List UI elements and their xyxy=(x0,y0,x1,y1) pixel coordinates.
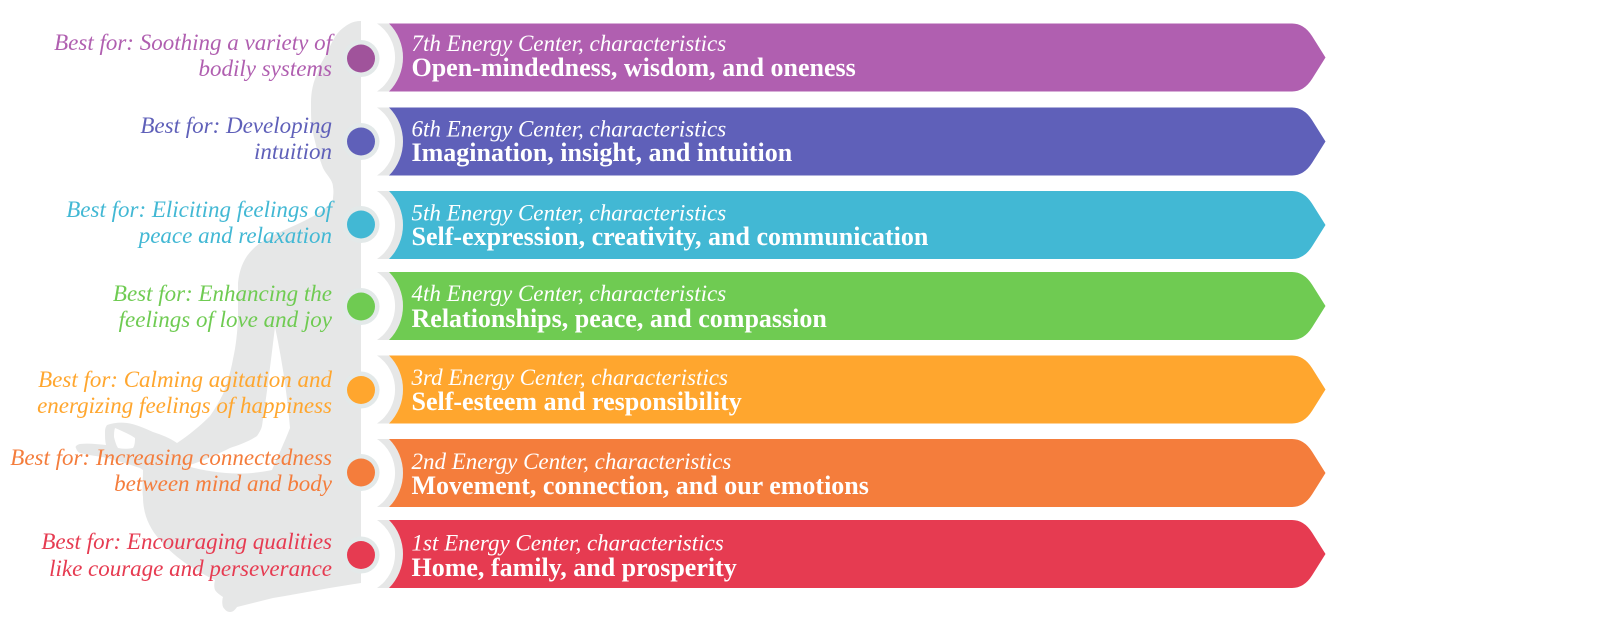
banner: 6th energy center: 6th Energy Center, characteristics xyxy=(412,116,726,142)
banner: 1st energy center: Home, family, and prosperity xyxy=(412,553,737,582)
banner: 5th energy center: 5th Energy Center, characteristics xyxy=(412,200,726,226)
best for: 3rd energy center: Best for: Calming agitation and xyxy=(38,367,332,392)
marker: 7th energy center xyxy=(342,40,380,77)
banner: 7th energy center: Open-mindedness, wisdom, and oneness xyxy=(412,53,856,82)
banner: 3rd energy center xyxy=(377,356,1326,424)
best for: 4th energy center: feelings of love and joy xyxy=(119,307,333,332)
best for: 1st energy center: Best for: Encouraging qualities xyxy=(41,529,332,554)
best for: 7th energy center: Best for: Soothing a variety of xyxy=(54,30,336,55)
marker: 3rd energy center xyxy=(342,372,380,408)
best for: 3rd energy center: energizing feelings of happiness xyxy=(37,393,332,418)
banner: 2nd energy center: Movement, connection, and our emotions xyxy=(412,471,869,500)
best for: 7th energy center: bodily systems xyxy=(198,56,332,81)
best for: 6th energy center: intuition xyxy=(254,139,332,164)
best for: 4th energy center: Best for: Enhancing the xyxy=(113,281,332,306)
banner: 4th energy center: Relationships, peace, and compassion xyxy=(412,304,827,333)
best for: 5th energy center: peace and relaxation xyxy=(137,223,332,248)
banner: 2nd energy center xyxy=(377,439,1326,507)
banner: 4th energy center: 4th Energy Center, characteristics xyxy=(412,281,726,306)
marker: 5th energy center xyxy=(342,206,380,243)
best for: 1st energy center: like courage and perseverance xyxy=(49,556,332,581)
banner: 2nd energy center: 2nd Energy Center, characteristics xyxy=(412,449,731,474)
best for: 2nd energy center: between mind and body xyxy=(114,471,333,496)
best for: 6th energy center: Best for: Developing xyxy=(140,113,332,138)
banner: 6th energy center: Imagination, insight, and intuition xyxy=(412,138,793,167)
row: 7th energy center xyxy=(54,24,1326,92)
row: 3rd energy center xyxy=(37,356,1326,424)
row: 6th energy center xyxy=(140,108,1326,176)
marker: 6th energy center xyxy=(342,123,380,160)
best for: 5th energy center: Best for: Eliciting feelings of xyxy=(66,197,336,222)
banner: 4th energy center xyxy=(377,272,1326,340)
best for: 7th energy center xyxy=(54,30,336,81)
banner: 3rd energy center: Self-esteem and responsibility xyxy=(412,387,742,416)
row: 1st energy center xyxy=(41,520,1326,588)
banner: 5th energy center: Self-expression, creativity, and communication xyxy=(412,222,929,251)
row: 4th energy center xyxy=(113,272,1326,340)
banner: 3rd energy center: 3rd Energy Center, characteristics xyxy=(410,365,728,390)
best for: 6th energy center xyxy=(140,113,332,164)
banner: 1st energy center xyxy=(377,520,1326,588)
best for: 2nd energy center: Best for: Increasing connectedness xyxy=(10,445,332,470)
row: 2nd energy center xyxy=(10,439,1326,507)
banner: 7th energy center: 7th Energy Center, characteristics xyxy=(412,31,726,56)
marker: 4th energy center xyxy=(342,288,380,325)
row: 5th energy center xyxy=(66,191,1326,259)
banner: 1st energy center: 1st Energy Center, characteristics xyxy=(412,530,724,556)
best for: 5th energy center xyxy=(66,197,336,248)
best for: 1st energy center xyxy=(41,529,332,581)
best for: 4th energy center xyxy=(113,281,333,332)
banner: 7th energy center xyxy=(377,24,1326,92)
best for: 3rd energy center xyxy=(37,367,332,418)
best for: 2nd energy center xyxy=(10,445,333,496)
marker: 2nd energy center xyxy=(342,454,380,491)
marker: 1st energy center xyxy=(342,536,380,574)
meditating figure silhouette xyxy=(76,21,361,612)
banner: 6th energy center xyxy=(377,108,1326,176)
banner: 5th energy center xyxy=(377,191,1326,259)
